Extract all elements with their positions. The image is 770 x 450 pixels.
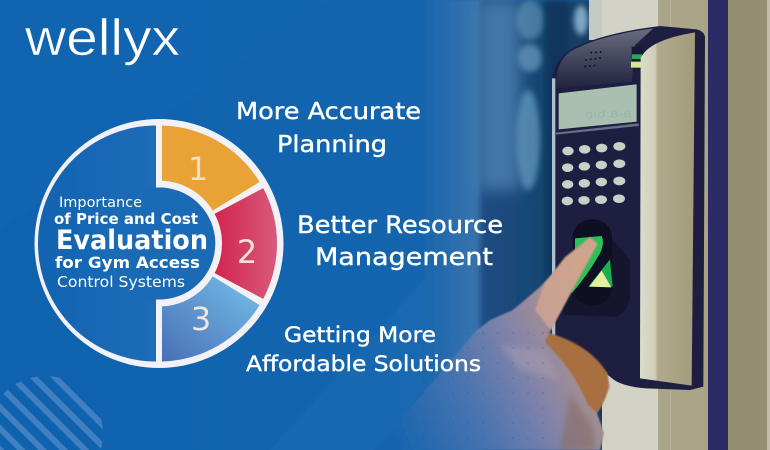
device top cap bbox=[556, 28, 653, 88]
donut diagram bbox=[34, 119, 284, 368]
white ring bbox=[34, 119, 284, 368]
centre blue area bbox=[38, 126, 215, 362]
label: better resource management bbox=[297, 211, 503, 271]
label: better resource management: Management bbox=[315, 243, 493, 271]
label: getting more affordable solutions: Affordable Solutions bbox=[246, 352, 481, 376]
label: getting more affordable solutions bbox=[246, 323, 481, 376]
segment 2: 2 bbox=[237, 233, 257, 271]
knuckle shading bbox=[500, 345, 560, 380]
label: getting more affordable solutions: Getting More bbox=[284, 323, 436, 347]
label: more accurate planning: More Accurate bbox=[236, 99, 421, 125]
speaker holes bbox=[584, 51, 602, 67]
blurred background of the photo bbox=[425, 0, 605, 450]
fingertip warm tone bbox=[535, 238, 597, 330]
keypad bbox=[562, 142, 625, 205]
decorative striped circle bbox=[0, 376, 103, 450]
device body bbox=[552, 26, 705, 390]
photo: access control device and hand bbox=[372, 0, 770, 450]
status LED bbox=[631, 47, 643, 68]
centre title: of Price and Cost bbox=[54, 210, 198, 228]
label: better resource management: Better Resource bbox=[297, 211, 503, 239]
hand bbox=[372, 237, 610, 450]
fingerprint scanner bbox=[563, 219, 630, 317]
centre title: Importance bbox=[59, 195, 142, 211]
label: more accurate planning: Planning bbox=[277, 132, 387, 158]
centre title: for Gym Access bbox=[55, 253, 200, 272]
centre title bbox=[54, 195, 208, 291]
device bbox=[552, 26, 705, 390]
label: more accurate planning bbox=[236, 99, 421, 158]
dotted overlay bbox=[380, 320, 550, 450]
logo: wellyx bbox=[24, 9, 180, 66]
centre title: Control Systems bbox=[57, 273, 185, 291]
segment 3: 3 bbox=[191, 300, 211, 338]
hand and index finger bbox=[372, 237, 610, 450]
segment 1 bbox=[162, 126, 260, 211]
centre title: Evaluation bbox=[56, 225, 208, 256]
thumb brown shading bbox=[545, 333, 608, 413]
segment 3 bbox=[162, 276, 260, 362]
LCD screen bbox=[556, 84, 639, 135]
beige side panel bbox=[640, 32, 695, 386]
LCD screen: gid:8-8 bbox=[585, 109, 632, 120]
segment 1: 1 bbox=[188, 150, 208, 188]
segment 2 bbox=[215, 188, 277, 299]
door frame and wall bbox=[589, 0, 770, 450]
